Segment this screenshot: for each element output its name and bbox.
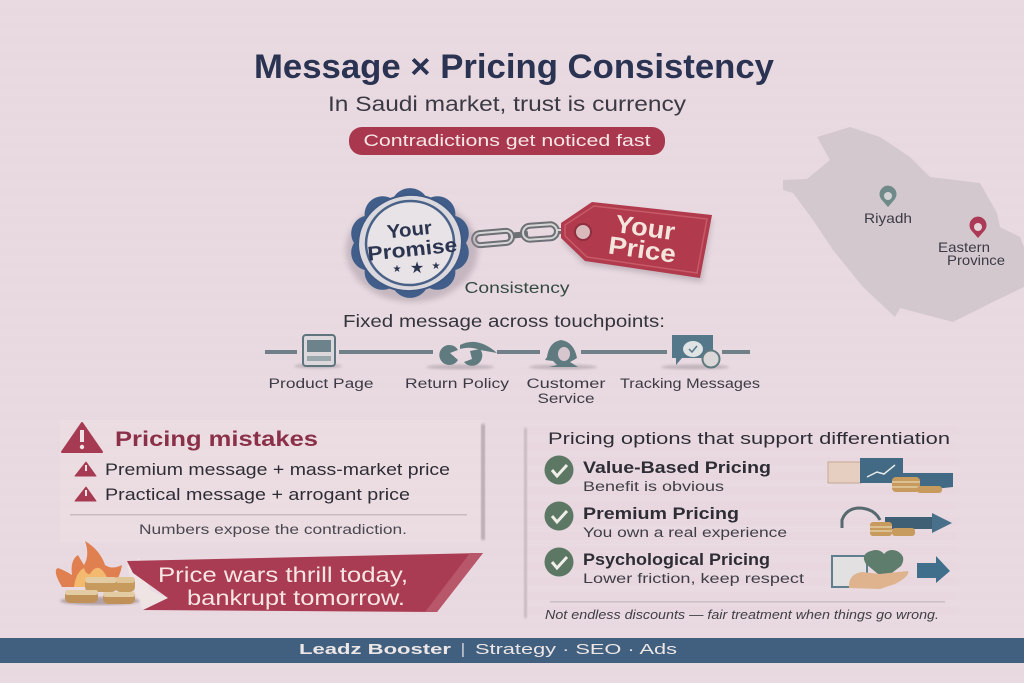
callout pill: Contradictions get noticed fast xyxy=(364,131,651,150)
heading: pricing options: Pricing options that support differentiation xyxy=(548,429,950,448)
subtitle: In Saudi market, trust is currency xyxy=(328,93,687,116)
icon: warning large xyxy=(62,423,102,452)
heading: touchpoints: Fixed message across touchpoints: xyxy=(343,311,665,331)
banner: price wars: bankrupt tomorrow. xyxy=(187,587,405,610)
option: psychological: Lower friction, keep respect xyxy=(583,571,804,586)
icon: hand, heart and arrow xyxy=(832,550,950,589)
seal: Your Promise xyxy=(346,188,478,302)
seal: Your Promise: Promise xyxy=(366,234,458,266)
footnote: Not endless discounts — fair treatment when things go wrong. xyxy=(545,607,939,622)
option: premium: Premium Pricing xyxy=(583,505,739,523)
label: Tracking Messages: Tracking Messages xyxy=(620,376,760,391)
seal: Your Promise: ★ xyxy=(393,264,402,275)
option: premium xyxy=(544,502,952,540)
icon: Eastern Province pin xyxy=(970,217,986,238)
option: value-based: Benefit is obvious xyxy=(583,479,724,494)
label: Customer Service: Service xyxy=(538,391,594,406)
title: Message × Pricing Consistency xyxy=(254,48,774,86)
option: psychological: Psychological Pricing xyxy=(583,551,770,569)
option: psychological xyxy=(544,548,950,589)
callout pill xyxy=(349,127,665,155)
icon: chart and coins xyxy=(828,458,953,493)
seal: Your Promise: ★ xyxy=(410,260,424,277)
warning row 2: Practical message + arrogant price xyxy=(105,486,410,504)
touchpoints row xyxy=(265,335,760,406)
option: value-based xyxy=(544,456,953,494)
seal: Your Promise: Your xyxy=(386,218,434,243)
banner: price wars: Price wars thrill today, xyxy=(158,564,408,587)
label: Eastern Province: Province xyxy=(947,252,1005,268)
icon: Riyadh pin xyxy=(880,186,896,207)
icon: fire and coins xyxy=(56,541,140,605)
warning row 1: Premium message + mass-market price xyxy=(105,461,450,479)
icon: product page xyxy=(303,335,335,366)
label: Consistency: Consistency xyxy=(464,280,570,297)
label: Customer Service: Customer xyxy=(526,376,606,391)
heading: pricing mistakes: Pricing mistakes xyxy=(115,427,318,451)
banner: price wars xyxy=(56,541,483,612)
footer bar: Strategy · SEO · Ads xyxy=(475,641,677,658)
chain xyxy=(474,224,586,246)
note: numbers: Numbers expose the contradiction. xyxy=(139,522,407,537)
map: Saudi Arabia xyxy=(783,127,1024,322)
panel: pricing mistakes xyxy=(60,420,485,542)
icon: customer service xyxy=(545,340,578,367)
label: Eastern Province: Eastern xyxy=(938,239,990,255)
label: Return Policy: Return Policy xyxy=(405,376,509,391)
option: value-based: Value-Based Pricing xyxy=(583,459,771,477)
icon: tracking messages xyxy=(672,335,720,368)
footer bar: Leadz Booster xyxy=(299,641,451,658)
seal: Your Promise: ★ xyxy=(432,261,441,272)
label: Product Page: Product Page xyxy=(268,376,374,391)
price tag: Your Price: Price xyxy=(606,231,678,269)
icon: headset, coins and arrow xyxy=(842,508,952,536)
price tag: Your Price: Your xyxy=(613,210,677,246)
price tag: Your Price xyxy=(561,202,712,282)
label: Riyadh: Riyadh xyxy=(864,210,912,226)
option: premium: You own a real experience xyxy=(583,525,787,540)
icon: return policy xyxy=(439,342,497,366)
footer bar xyxy=(0,638,1024,663)
footer bar: | xyxy=(461,641,465,658)
panel: pricing options xyxy=(524,426,957,622)
